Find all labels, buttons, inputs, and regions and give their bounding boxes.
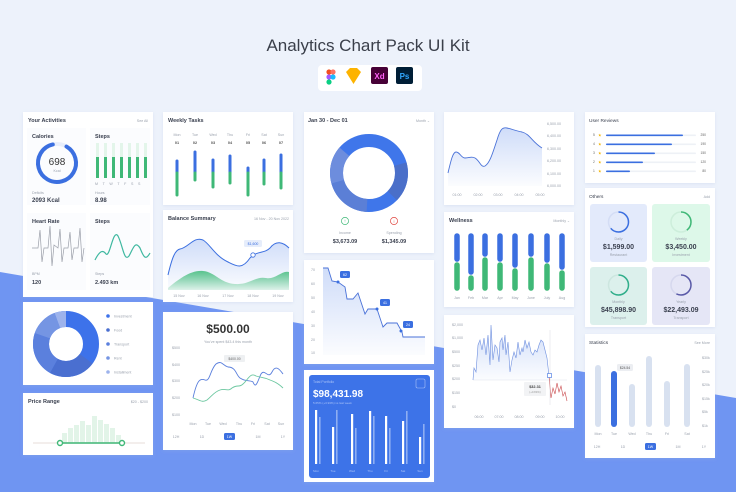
panel: weekly tasks: 07 xyxy=(279,141,283,145)
panel: spending line chart: Thu xyxy=(236,422,242,426)
panel: income vs spending donut: Income xyxy=(339,231,351,235)
panel: spending line chart: $200 xyxy=(172,396,180,400)
panel: price line chart: 03:00 xyxy=(494,193,502,197)
panel: spending line chart xyxy=(163,312,293,450)
panel: wellness: June xyxy=(527,296,535,300)
panel: statistics: $15k xyxy=(702,397,710,401)
panel: your activities: 120 xyxy=(32,280,41,286)
panel: statistics: 1M xyxy=(676,445,680,449)
panel: your activities: Your Activities xyxy=(28,118,66,124)
panel: category donut: Food xyxy=(114,328,122,332)
panel: wellness: Jan xyxy=(454,296,460,300)
panel: stock chart: $1,000 xyxy=(452,336,463,340)
panel: weekly tasks: Thu xyxy=(227,133,233,137)
panel: user reviews: 4 xyxy=(593,142,595,146)
panel: user reviews: 3 xyxy=(593,151,595,155)
panel: total portfolio: Mon xyxy=(313,469,319,473)
panel: spending line chart: $500.00 xyxy=(206,322,250,336)
background wave xyxy=(0,272,736,492)
panel: statistics: 1W xyxy=(648,445,654,449)
panel: total portfolio: Sun xyxy=(417,469,423,473)
panel: your activities: Steps xyxy=(95,272,104,276)
panel: stock chart: 10:00 xyxy=(556,415,564,419)
panel: weekly tasks: Sat xyxy=(261,133,267,137)
panel: user reviews: ★ xyxy=(598,132,602,138)
panel: statistics: Sat xyxy=(684,432,690,436)
tool icons: Ps xyxy=(400,72,410,81)
panel: statistics: $1k xyxy=(702,424,708,428)
panel: price line chart: 6,400.00 xyxy=(547,134,561,138)
panel: price line chart: 05:00 xyxy=(536,193,544,197)
panel: user reviews: 150 xyxy=(700,151,706,155)
panel: your activities: BPM xyxy=(32,272,40,276)
panel: income vs spending donut: $3,673.09 xyxy=(333,239,357,245)
panel: user reviews xyxy=(585,112,715,183)
panel: spending line chart: 1W xyxy=(227,435,233,439)
panel: price line chart: 6,000.00 xyxy=(547,184,561,188)
tile: yearly: Yearly xyxy=(676,300,686,304)
panel: spending line chart: $100 xyxy=(172,413,180,417)
panel: total portfolio xyxy=(304,370,434,482)
panel: spending line chart: Mon xyxy=(190,422,196,426)
panel: wellness: Monthly ⌄ xyxy=(553,219,570,223)
panel: step line chart: 50 xyxy=(311,296,315,300)
tile: weekly: $3,450.00 xyxy=(665,244,697,251)
panel: step line chart xyxy=(304,260,434,364)
panel: income vs spending donut: Jan 30 - Dec 01 xyxy=(308,118,348,124)
panel: your activities: 698 xyxy=(49,157,66,168)
panel: stock chart: 09:00 xyxy=(536,415,544,419)
tile: weekly xyxy=(652,204,710,262)
panel: weekly tasks: 06 xyxy=(262,141,266,145)
panel: price range: $20 - $200 xyxy=(131,400,148,404)
panel: step line chart: 62 xyxy=(343,273,347,277)
panel: statistics: Statistics xyxy=(589,340,609,346)
panel: total portfolio: Tue xyxy=(330,469,336,473)
panel: spending line chart: $300 xyxy=(172,379,180,383)
panel: category donut xyxy=(23,302,153,385)
panel: statistics xyxy=(585,334,715,458)
panel: total portfolio: $98,431.98 xyxy=(313,389,363,400)
panel: weekly tasks: Mon xyxy=(174,133,180,137)
panel: income vs spending donut: Spending xyxy=(386,231,402,235)
panel: balance summary: $1,600 xyxy=(248,242,258,246)
panel: income vs spending donut: ↑ xyxy=(344,219,346,225)
panel: wellness: May xyxy=(512,296,519,300)
panel: statistics: 1D xyxy=(621,445,626,449)
panel: weekly tasks: 01 xyxy=(175,141,179,145)
panel: wellness: Aug xyxy=(559,296,565,300)
panel: step line chart: 30 xyxy=(311,324,315,328)
panel: total portfolio: Sat xyxy=(401,469,405,473)
panel: price line chart: 6,200.00 xyxy=(547,159,561,163)
panel: wellness: July xyxy=(544,296,550,300)
panel: statistics: $20k xyxy=(702,383,710,387)
tile: yearly: $22,493.09 xyxy=(663,307,699,314)
panel: user reviews: ★ xyxy=(598,160,602,164)
panel: stock chart: $150 xyxy=(452,391,460,395)
panel: user reviews: 2 xyxy=(593,160,595,164)
panel: step line chart: 24 xyxy=(406,323,410,327)
panel: spending line chart: Sat xyxy=(264,422,270,426)
panel: step line chart: 70 xyxy=(311,268,315,272)
tool icons xyxy=(318,65,422,91)
panel: weekly tasks: 02 xyxy=(193,141,197,145)
panel: price line chart: 04:00 xyxy=(514,193,524,197)
panel: stock chart: $32.31 xyxy=(529,385,541,389)
panel: your activities: 8.98 xyxy=(95,198,107,204)
tile: daily: $1,599.00 xyxy=(603,244,634,251)
panel: spending line chart: 1M xyxy=(256,435,260,439)
panel: stock chart: $200 xyxy=(452,377,460,381)
panel: your activities: Kcal xyxy=(54,169,61,173)
tile: weekly: Investment xyxy=(672,253,690,257)
panel: user reviews: ★ xyxy=(598,150,602,156)
panel: user reviews: ★ xyxy=(598,142,602,146)
panel: user reviews: 80 xyxy=(702,169,706,173)
panel: user reviews: 5 xyxy=(593,133,595,137)
panel: statistics: $25k xyxy=(702,370,710,374)
panel: stock chart xyxy=(444,315,574,428)
panel: stock chart: 06:00 xyxy=(474,415,484,419)
tile: yearly xyxy=(652,267,710,325)
panel: price line chart: 6,500.00 xyxy=(547,122,561,126)
panel: balance summary: 15 Nov xyxy=(173,294,185,298)
title: Analytics Chart Pack UI Kit xyxy=(266,36,470,55)
panel: user reviews: 190 xyxy=(700,142,706,146)
panel: spending line chart: Fri xyxy=(251,422,255,426)
panel: statistics: See More xyxy=(694,341,710,345)
panel: statistics: Mon xyxy=(594,432,602,436)
panel: statistics: $5k xyxy=(702,410,708,414)
panel: price range: Price Range xyxy=(28,399,60,405)
tile: monthly xyxy=(590,267,647,325)
panel: total portfolio: Total Portfolio xyxy=(313,380,334,384)
panel: spending line chart: Tue xyxy=(205,422,211,426)
panel: price line chart: 01:00 xyxy=(452,193,462,197)
panel: statistics: $24.54 xyxy=(620,366,630,370)
panel: stock chart: $0 xyxy=(452,405,456,409)
panel: spending line chart: Sun xyxy=(278,422,284,426)
panel: income vs spending donut: Month ⌄ xyxy=(416,119,430,123)
panel: step line chart: 20 xyxy=(311,338,315,342)
panel: spending line chart: 12H xyxy=(173,435,180,439)
panel: balance summary: 16 Nov - 20 Nov 2022 xyxy=(254,217,289,221)
panel: your activities: Calories xyxy=(32,134,54,140)
panel: statistics: Wed xyxy=(628,432,636,436)
panel: price line chart: 02:00 xyxy=(474,193,482,197)
panel: balance summary: Balance Summary xyxy=(168,216,217,222)
panel: your activities: 2.493 km xyxy=(95,280,118,286)
panel: category donut: Transport xyxy=(114,342,129,346)
panel: weekly tasks: 04 xyxy=(228,141,233,145)
panel: step line chart: 10 xyxy=(311,351,315,355)
panel: stock chart: 07:00 xyxy=(494,415,504,419)
panel: weekly tasks: 03 xyxy=(211,141,215,145)
panel: your activities: Heart Rate xyxy=(32,219,60,225)
tile: weekly: Weekly xyxy=(675,237,687,241)
panel: your activities: MTWTFSS xyxy=(95,182,145,186)
panel: price line chart: 6,100.00 xyxy=(547,172,561,176)
panel: your activities: Hours xyxy=(95,191,105,195)
panel: others: Add xyxy=(704,195,710,199)
panel: total portfolio: Wed xyxy=(349,469,355,473)
tile: daily xyxy=(590,204,647,262)
panel: stock chart: 08:00 xyxy=(514,415,524,419)
panel: user reviews: User Reviews xyxy=(589,118,619,124)
tile: monthly: Transport xyxy=(611,316,626,320)
panel: your activities: Deficits xyxy=(32,191,44,195)
panel: income vs spending donut: $1,345.09 xyxy=(382,239,406,245)
panel: your activities: Steps xyxy=(95,134,110,140)
panel: statistics: 1Y xyxy=(702,445,707,449)
panel: income vs spending donut: ↓ xyxy=(393,219,395,225)
panel: wellness: Mar xyxy=(482,296,489,300)
panel: stock chart: $500 xyxy=(452,350,460,354)
panel: spending line chart: $500 xyxy=(172,346,180,350)
panel: balance summary: 16 Nov xyxy=(197,294,209,298)
panel: wellness xyxy=(444,212,574,307)
panel: your activities: 2093 Kcal xyxy=(32,198,60,204)
panel: total portfolio: 5.65% (+3.93%) vs last week xyxy=(313,401,352,405)
panel: weekly tasks: Weekly Tasks xyxy=(168,118,204,124)
panel: price line chart xyxy=(444,112,574,205)
panel: price range xyxy=(23,393,153,455)
tile: monthly: $45,898.90 xyxy=(601,307,636,314)
panel: balance summary: 17 Nov xyxy=(222,294,234,298)
panel: price line chart: 6,300.00 xyxy=(547,147,561,151)
panel: statistics: Fri xyxy=(665,432,669,436)
panel: your activities: Steps xyxy=(95,219,110,225)
panel: wellness: Wellness xyxy=(449,218,473,224)
panel: category donut: Investment xyxy=(114,314,132,318)
panel: total portfolio: Thu xyxy=(367,469,373,473)
panel: statistics: Thu xyxy=(646,432,652,436)
panel: spending line chart: $400 xyxy=(172,363,180,367)
panel: weekly tasks: Sun xyxy=(278,133,284,137)
panel: wellness: Apr xyxy=(497,296,504,300)
tile: monthly: Monthly xyxy=(612,300,625,304)
panel: wellness: Feb xyxy=(468,296,474,300)
panel: stock chart: $250 xyxy=(452,364,460,368)
panel: user reviews: ★ xyxy=(598,168,602,174)
tile: daily: Daily xyxy=(614,237,623,241)
panel: step line chart: 60 xyxy=(311,282,315,286)
tile: daily: Restaurant xyxy=(610,253,627,257)
panel: stock chart: $2,000 xyxy=(452,323,463,327)
tile: yearly: Transport xyxy=(673,316,689,320)
panel: total portfolio: Fri xyxy=(384,469,388,473)
panel: weekly tasks xyxy=(163,112,293,205)
panel: user reviews: 120 xyxy=(700,160,706,164)
panel: stock chart: (+0.83%) xyxy=(529,390,541,394)
panel: spending line chart: $400.00 xyxy=(228,357,241,361)
panel: weekly tasks: Tue xyxy=(192,133,198,137)
panel: weekly tasks: Wed xyxy=(209,133,217,137)
panel: user reviews: 1 xyxy=(593,169,595,173)
panel: income vs spending donut xyxy=(304,112,434,253)
panel: others: Others xyxy=(589,194,604,200)
panel: your activities xyxy=(23,112,153,297)
panel: spending line chart: Wed xyxy=(219,422,227,426)
panel: user reviews: 250 xyxy=(700,133,706,137)
panel: statistics: 12H xyxy=(594,445,601,449)
tool icons: Xd xyxy=(374,72,385,81)
panel: category donut: Rent xyxy=(114,356,122,360)
panel: balance summary xyxy=(163,210,293,302)
panel: spending line chart: 1Y xyxy=(281,435,286,439)
panel: weekly tasks: Fri xyxy=(246,133,250,137)
panel: step line chart: 41 xyxy=(383,301,387,305)
panel: step line chart: 40 xyxy=(311,310,315,314)
panel: balance summary: 19 Nov xyxy=(272,294,284,298)
panel: spending line chart: 1D xyxy=(200,435,205,439)
panel: balance summary: 18 Nov xyxy=(247,294,259,298)
panel: others xyxy=(585,188,715,327)
panel: your activities: See All xyxy=(137,119,148,123)
panel: spending line chart: You've spent $43.4 this month xyxy=(204,340,252,344)
panel: statistics: $30k xyxy=(702,356,710,360)
panel: category donut: Installment xyxy=(114,370,131,374)
panel: statistics: Tue xyxy=(611,432,617,436)
panel: weekly tasks: 05 xyxy=(246,141,250,145)
